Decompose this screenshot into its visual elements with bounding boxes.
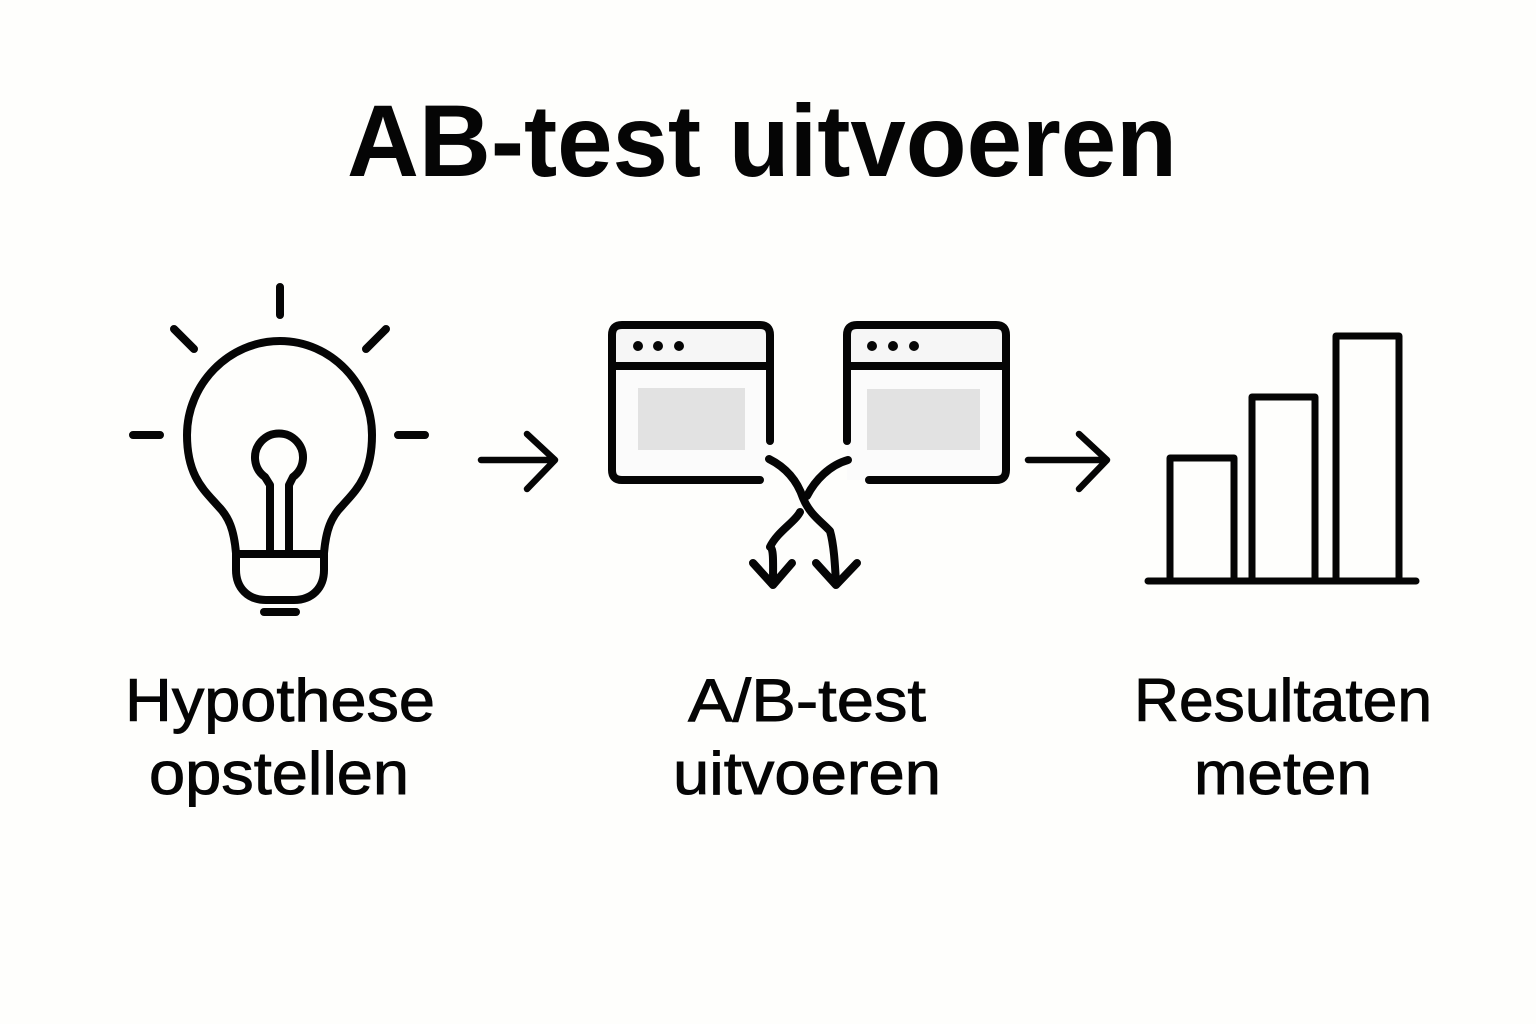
label: run test: A/B-test [688, 667, 926, 734]
icon: window A [612, 325, 770, 480]
icon: window B [847, 325, 1006, 480]
label: results [1134, 667, 1432, 807]
icon: light bulb [133, 287, 425, 612]
label: hypothesis [125, 667, 435, 807]
title: AB-test uitvoeren [347, 84, 1177, 198]
icon: bar chart [1148, 336, 1416, 581]
label: results: meten [1194, 740, 1372, 807]
arrow: test to results [1028, 434, 1107, 489]
label: hypothesis: opstellen [149, 740, 409, 807]
label: run test: uitvoeren [673, 740, 941, 807]
arrow: bulb to test [481, 434, 555, 489]
icon: crossing split arrows [753, 459, 857, 585]
label: results: Resultaten [1134, 667, 1432, 734]
label: hypothesis: Hypothese [125, 667, 435, 734]
label: run test [673, 667, 941, 807]
